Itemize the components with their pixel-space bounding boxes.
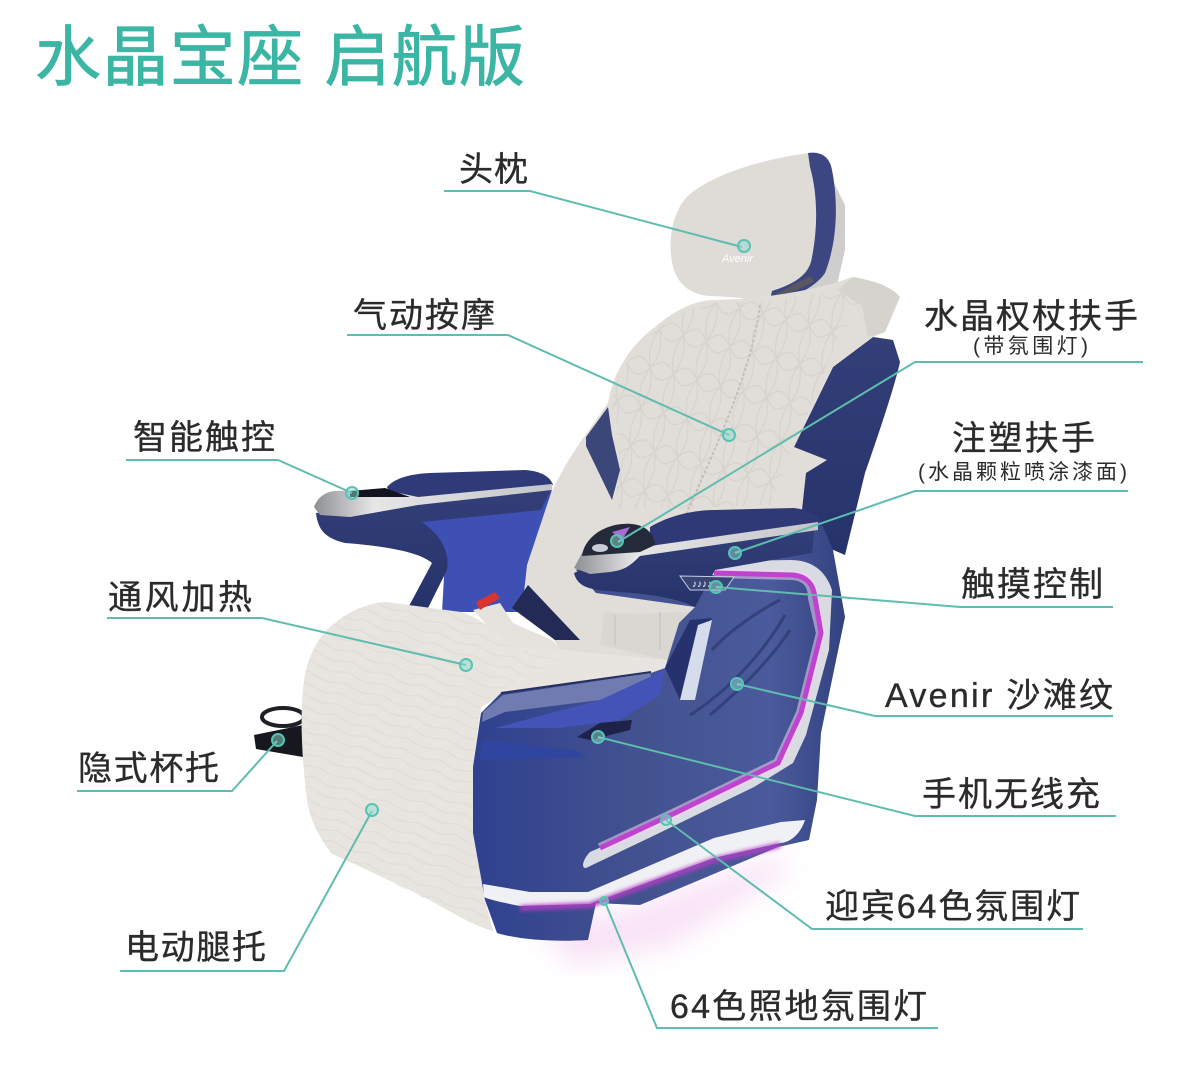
label: smart touch [126, 419, 358, 499]
label: Avenir beach pattern [731, 677, 1113, 716]
label: electric leg rest [120, 804, 378, 971]
right armrest: ♪♪♪♪ [692, 579, 712, 590]
cup holder [254, 708, 304, 757]
seat illustration [254, 153, 900, 965]
label: wireless phone charger: 手机无线充 [922, 776, 1100, 814]
label: ground ambient light: 64色照地氛围灯 [670, 988, 927, 1026]
headrest [671, 153, 845, 300]
blue seat body [473, 520, 845, 941]
seat cushion strap and buckle [473, 585, 580, 665]
label: ventilation and heating: 通风加热 [108, 579, 252, 617]
label: headrest [444, 151, 750, 252]
label: welcome ambient light [661, 815, 1083, 929]
silver trim [583, 560, 832, 868]
label: headrest: 头枕 [459, 151, 528, 189]
label: moulded armrest [729, 420, 1128, 559]
right armrest [574, 508, 822, 607]
label: pneumatic massage: 气动按摩 [353, 297, 495, 335]
purple ambient light strip [600, 573, 821, 848]
label: touch control [710, 566, 1113, 607]
title: 水晶宝座 启航版 [35, 20, 525, 94]
label: wireless phone charger [592, 731, 1116, 816]
leg rest [302, 602, 668, 931]
label: crystal scepter armrest: 水晶权杖扶手 [924, 298, 1138, 336]
underglow [540, 855, 790, 965]
left armrest [314, 470, 553, 612]
label: moulded armrest: 注塑扶手 [952, 420, 1095, 458]
blue back side panel [760, 337, 900, 555]
label: moulded armrest: (水晶颗粒喷涂漆面) [918, 461, 1127, 484]
label: ventilation and heating [107, 579, 472, 671]
headrest: Avenir [721, 253, 754, 265]
label: ground ambient light [600, 897, 938, 1028]
label: Avenir beach pattern: Avenir 沙滩纹 [885, 677, 1113, 715]
phone wireless charger slot [577, 720, 632, 740]
label: hidden cup holder [77, 734, 284, 791]
label: welcome ambient light: 迎宾64色氛围灯 [825, 888, 1080, 926]
label: touch control: 触摸控制 [961, 566, 1103, 604]
backrest [523, 277, 900, 662]
label: crystal scepter armrest [611, 298, 1143, 547]
label: crystal scepter armrest: (带氛围灯) [973, 335, 1088, 358]
label: smart touch: 智能触控 [133, 419, 275, 457]
label: pneumatic massage [347, 297, 735, 441]
label: hidden cup holder: 隐式杯托 [78, 750, 219, 788]
bottom white light [483, 820, 805, 908]
label: electric leg rest: 电动腿托 [125, 929, 266, 967]
